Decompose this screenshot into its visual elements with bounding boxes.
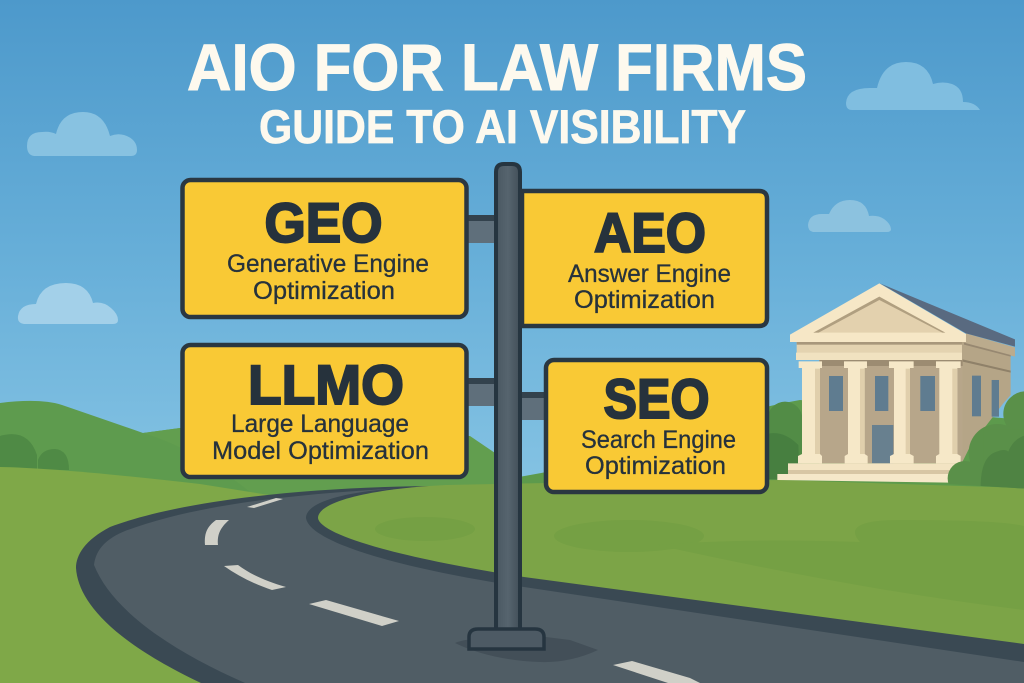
hills: left (0, 401, 520, 500)
cloud: upper left (27, 112, 137, 156)
sign: SEO (546, 360, 767, 492)
sign: AEO: Answer Engine (568, 260, 731, 288)
steps (788, 463, 961, 471)
cloud: upper right (846, 62, 980, 110)
windows and door (829, 376, 999, 463)
entablature (797, 342, 962, 360)
sign: AEO (522, 191, 767, 326)
sign: GEO: Optimization (253, 277, 395, 305)
road (76, 486, 1024, 683)
post base (469, 629, 544, 649)
cloud: lower left (18, 283, 118, 324)
sky background (0, 0, 1024, 500)
sign: GEO (182, 180, 466, 317)
sign: LLMO: LLMO (248, 353, 404, 416)
building (760, 283, 1024, 496)
building front wall (819, 360, 963, 463)
lawn: left (0, 467, 300, 683)
cloud: middle right (808, 200, 891, 232)
lawn shading (375, 517, 1024, 610)
sign: LLMO: Large Language (231, 410, 409, 438)
road surface (94, 488, 1024, 683)
bush: left of building (769, 402, 802, 480)
sign: GEO: GEO (264, 191, 382, 254)
building side wall (962, 333, 1011, 463)
sign: AEO: Optimization (574, 286, 715, 314)
lawn: right (318, 480, 1024, 644)
lane dashes (205, 498, 700, 683)
sign: SEO: Search Engine (581, 426, 736, 454)
post arms (466, 215, 546, 420)
sign: LLMO: Model Optimization (212, 437, 429, 465)
bushes: right of building (948, 391, 1024, 496)
columns (798, 361, 961, 463)
sign: GEO: Generative Engine (227, 250, 429, 278)
sign: LLMO (182, 345, 466, 477)
post shadow (455, 637, 598, 662)
title: AIO FOR LAW FIRMS (187, 30, 807, 104)
pediment (790, 283, 966, 342)
sign: SEO: SEO (604, 367, 710, 430)
signpost (466, 164, 546, 649)
sign: SEO: Optimization (585, 452, 726, 480)
subtitle: GUIDE TO AI VISIBILITY (259, 100, 746, 153)
hill: right (500, 400, 1024, 500)
bushes: left (0, 434, 69, 470)
post pole (496, 164, 520, 632)
roof (880, 283, 1015, 347)
sign: AEO: AEO (594, 201, 706, 264)
